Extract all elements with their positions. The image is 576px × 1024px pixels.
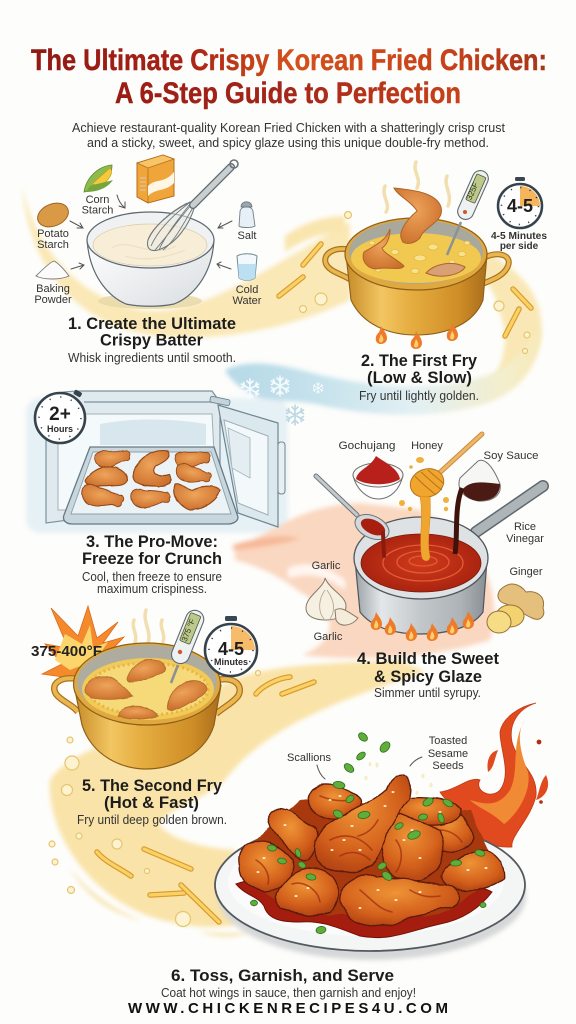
icon: timer 2+ hours: Hours: [47, 424, 73, 434]
icon: potato: [34, 199, 72, 231]
subtitle: and a sticky, sweet, and spicy glaze using this unique double-fry method.: [87, 135, 489, 150]
icon: whisk: [147, 160, 238, 251]
icon: golden pot: [325, 218, 509, 335]
icon: golden pot: [54, 643, 240, 769]
ingredient labels: Garlic: [312, 560, 341, 572]
heading: step 2: 2. The First Fry: [361, 352, 478, 370]
icon: snowflakes: [241, 376, 323, 425]
heading: step 4: [357, 650, 499, 686]
garnish labels: Toasted: [429, 735, 467, 747]
heading: step 1: [68, 315, 236, 350]
timer label: per side: [500, 241, 539, 252]
text: step 3 note: [82, 570, 222, 596]
icon: temperature burst: [42, 606, 124, 678]
icon: thermometer 375F: [169, 608, 206, 683]
text: step 3 note: maximum crispiness.: [97, 582, 207, 596]
icon: gochujang bowl: [353, 456, 403, 499]
icon: starch box: [137, 155, 174, 203]
icon: mixing bowl: [87, 212, 214, 309]
ingredient labels: Vinegar: [506, 533, 544, 545]
swoosh: peach glaze band: [233, 503, 494, 658]
heading: step 5: [82, 777, 223, 812]
leader lines: [317, 757, 422, 779]
garnish labels: Sesame: [428, 748, 468, 760]
icon: timer 4-5 minutes: [205, 616, 257, 676]
steam: [133, 610, 164, 644]
icon: salt shaker: [239, 202, 255, 228]
ingredient labels: [312, 440, 544, 643]
ingredient labels: Honey: [411, 440, 443, 452]
heading: step 6: 6. Toss, Garnish, and Serve: [171, 967, 394, 985]
icon: burner flames: [376, 323, 458, 349]
heading: step 3: 3. The Pro-Move:: [86, 533, 218, 551]
panel: step 5 second fry: [31, 606, 314, 926]
heading: step 5: (Hot & Fast): [104, 794, 199, 812]
ingredient labels: Baking: [36, 283, 70, 295]
heading: step 3: [82, 533, 222, 568]
icon: timer 4-5 minutes: Minutes: [214, 657, 248, 667]
icon: timer 4-5: [498, 177, 542, 228]
icon: thermometer 375F: 375 °F: [180, 617, 197, 643]
ingredient labels: Potato: [37, 228, 69, 240]
ingredient labels: Starch: [82, 204, 113, 216]
scallions: [250, 731, 486, 934]
icon: baking powder pile: [36, 261, 69, 279]
icon: chicken wings in pot: [363, 188, 465, 276]
text: step 2 note: Fry until lightly golden.: [359, 389, 479, 403]
icon: spoon with sauce: [316, 476, 393, 556]
icon: burner flames: [371, 611, 474, 641]
panel: step 3 freezer: [35, 376, 323, 596]
ingredient labels: Rice: [514, 521, 536, 533]
icon: ginger: [487, 584, 544, 633]
icon: garlic: [306, 578, 358, 625]
icon: corn: [84, 165, 113, 192]
ingredient labels: Powder: [34, 294, 72, 306]
garnish labels: Scallions: [287, 752, 332, 764]
sauce pool: [236, 876, 492, 938]
text: step 1 note: Whisk ingredients until smooth.: [68, 351, 236, 365]
icon: frozen wings: [80, 447, 220, 511]
heading: step 5: 5. The Second Fry: [82, 777, 223, 795]
icon: timer 4-5 minutes: 4-5: [218, 639, 244, 659]
title: A 6-Step Guide to Perfection: [115, 77, 461, 110]
fries and bubbles: [279, 212, 531, 354]
glaze streaks: [256, 796, 462, 912]
temperature label: 375-400°F: [31, 643, 102, 660]
subtitle: Achieve restaurant-quality Korean Fried Chicken with a shatteringly crisp crust: [72, 120, 505, 135]
icon: timer 2+ hours: [35, 389, 85, 443]
text: step 5 note: Fry until deep golden brown.: [77, 813, 227, 827]
swoosh: frozen blue band: [26, 325, 541, 533]
ingredient labels: Corn: [86, 194, 109, 206]
ingredient labels: Starch: [37, 239, 69, 251]
icon: flame: [440, 703, 548, 847]
icon: soy sauce cup: [455, 460, 500, 554]
ingredient labels: [34, 194, 262, 307]
sesame seeds: [256, 762, 488, 909]
icon: timer 2+ hours: 2+: [49, 404, 71, 425]
ingredient labels: Garlic: [314, 631, 343, 643]
panel: step 1 batter: [34, 155, 262, 365]
arrows: ingredients to bowl: [70, 195, 232, 269]
timer label: [491, 231, 547, 252]
heading: step 1: Crispy Batter: [100, 332, 204, 350]
heading: step 2: [361, 352, 478, 387]
icon: timer 4-5: 4-5: [507, 196, 533, 216]
icon: thermometer 325F: 325F: [465, 181, 480, 201]
panel: step 4 glaze: [306, 434, 544, 700]
swoosh: yellow batter band: [22, 185, 541, 405]
icon: freezer door: [210, 396, 285, 527]
website footer: WWW.CHICKENRECIPES4U.COM: [128, 1000, 448, 1017]
icon: cold water glass: [237, 254, 257, 280]
heading: step 4: & Spicy Glaze: [374, 668, 482, 686]
heading: step 3: Freeze for Crunch: [82, 550, 222, 568]
ingredient labels: Gochujang: [338, 440, 396, 452]
garnish labels: Seeds: [432, 760, 464, 772]
title: [31, 44, 547, 110]
ingredient labels: Soy Sauce: [484, 450, 538, 462]
icon: saucepan: [354, 517, 488, 634]
text: step 6 note: Coat hot wings in sauce, then garnish and enjoy!: [161, 986, 416, 1000]
icon: chicken pieces: [85, 657, 210, 719]
text: step 3 note: Cool, then freeze to ensure: [82, 570, 222, 584]
icon: plate: [215, 819, 526, 960]
ingredient labels: Ginger: [509, 566, 543, 578]
panel: step 6 serve: [161, 703, 548, 1000]
icon: glazed wings: [239, 775, 504, 926]
icon: freezer body: [46, 391, 220, 523]
text: step 4 note: Simmer until syrupy.: [374, 686, 481, 700]
panel: step 2 first fry: [279, 162, 547, 403]
ingredient labels: Cold: [236, 284, 258, 296]
icon: saucepan handle: [476, 486, 543, 532]
timer label: 4-5 Minutes: [491, 231, 547, 242]
subtitle: [72, 120, 505, 150]
icon: honey dipper: [399, 434, 482, 561]
heading: step 1: 1. Create the Ultimate: [68, 315, 236, 333]
ingredient labels: Salt: [238, 230, 256, 242]
garnish labels: [287, 735, 468, 772]
icon: baking tray: [63, 447, 238, 524]
fries and bubbles: [49, 670, 314, 926]
steam: [384, 162, 449, 212]
ingredient labels: Water: [233, 295, 262, 307]
swoosh: golden fry band: [50, 660, 425, 936]
heading: step 4: 4. Build the Sweet: [357, 650, 499, 668]
heading: step 2: (Low & Slow): [367, 369, 472, 387]
icon: thermometer 325F: [447, 168, 491, 255]
